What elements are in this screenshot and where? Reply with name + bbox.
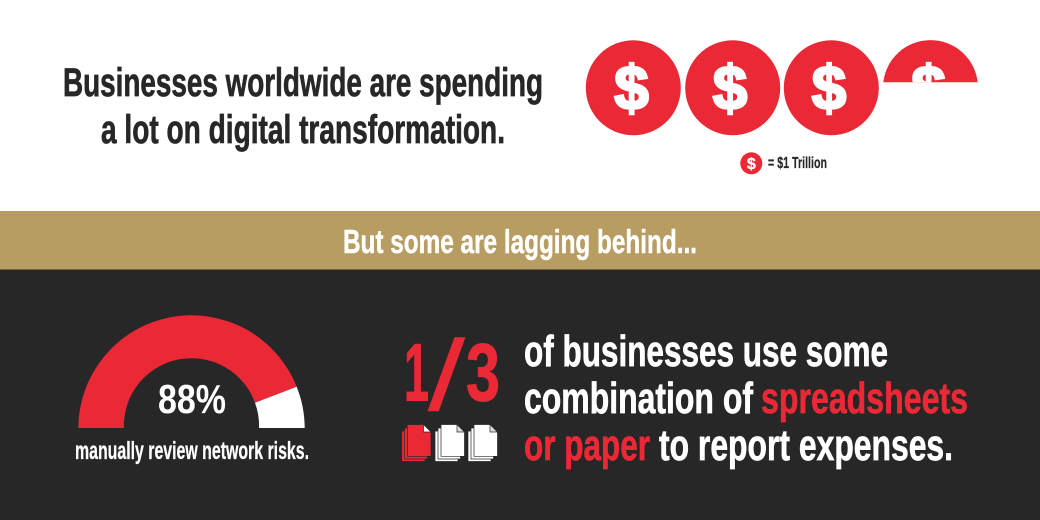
- text block: spreadsheets or paper statement: of businesses use some: [524, 327, 888, 376]
- icon: dollar coins row: $: [614, 54, 649, 124]
- heading: businesses spending: [63, 61, 543, 152]
- panel: dark statistics section: [0, 270, 1040, 520]
- banner: lagging behind: [0, 211, 1040, 270]
- gauge value: 88%: [158, 376, 226, 422]
- stat: one third: [404, 320, 500, 432]
- heading: businesses spending: Businesses worldwide are spending: [63, 61, 543, 105]
- text block: spreadsheets or paper statement: [524, 327, 968, 470]
- legend: one coin equals one trillion: = $1 Trillion: [768, 155, 827, 172]
- text block: spreadsheets or paper statement: spreadsheets: [761, 374, 968, 423]
- icon: dollar coins row: $: [713, 54, 747, 124]
- banner: lagging behind: But some are lagging behind...: [343, 223, 697, 260]
- panel: top spending section: [63, 40, 978, 174]
- icon: white documents two: [468, 424, 498, 462]
- icon: red documents: [402, 424, 431, 462]
- text block: spreadsheets or paper statement: combination of: [524, 374, 753, 423]
- heading: businesses spending: a lot on digital transformation.: [101, 108, 505, 152]
- stat: one third: 3: [466, 328, 500, 418]
- icon: three document stacks: [402, 424, 498, 462]
- stat: one third: 1: [404, 328, 429, 418]
- stat: one third: /: [428, 320, 465, 432]
- chart: 88 percent gauge: [78, 315, 305, 428]
- icon: dollar coins row: $: [911, 54, 946, 124]
- legend: one coin equals one trillion: [740, 152, 827, 174]
- legend: one coin equals one trillion: $: [747, 156, 756, 173]
- icon: dollar coins row: $: [812, 54, 846, 124]
- caption: manually review network risks: manually review network risks.: [75, 437, 309, 465]
- icon: white documents one: [435, 424, 464, 462]
- text block: spreadsheets or paper statement: or paper: [524, 421, 650, 470]
- icon: dollar coins row: [586, 40, 978, 135]
